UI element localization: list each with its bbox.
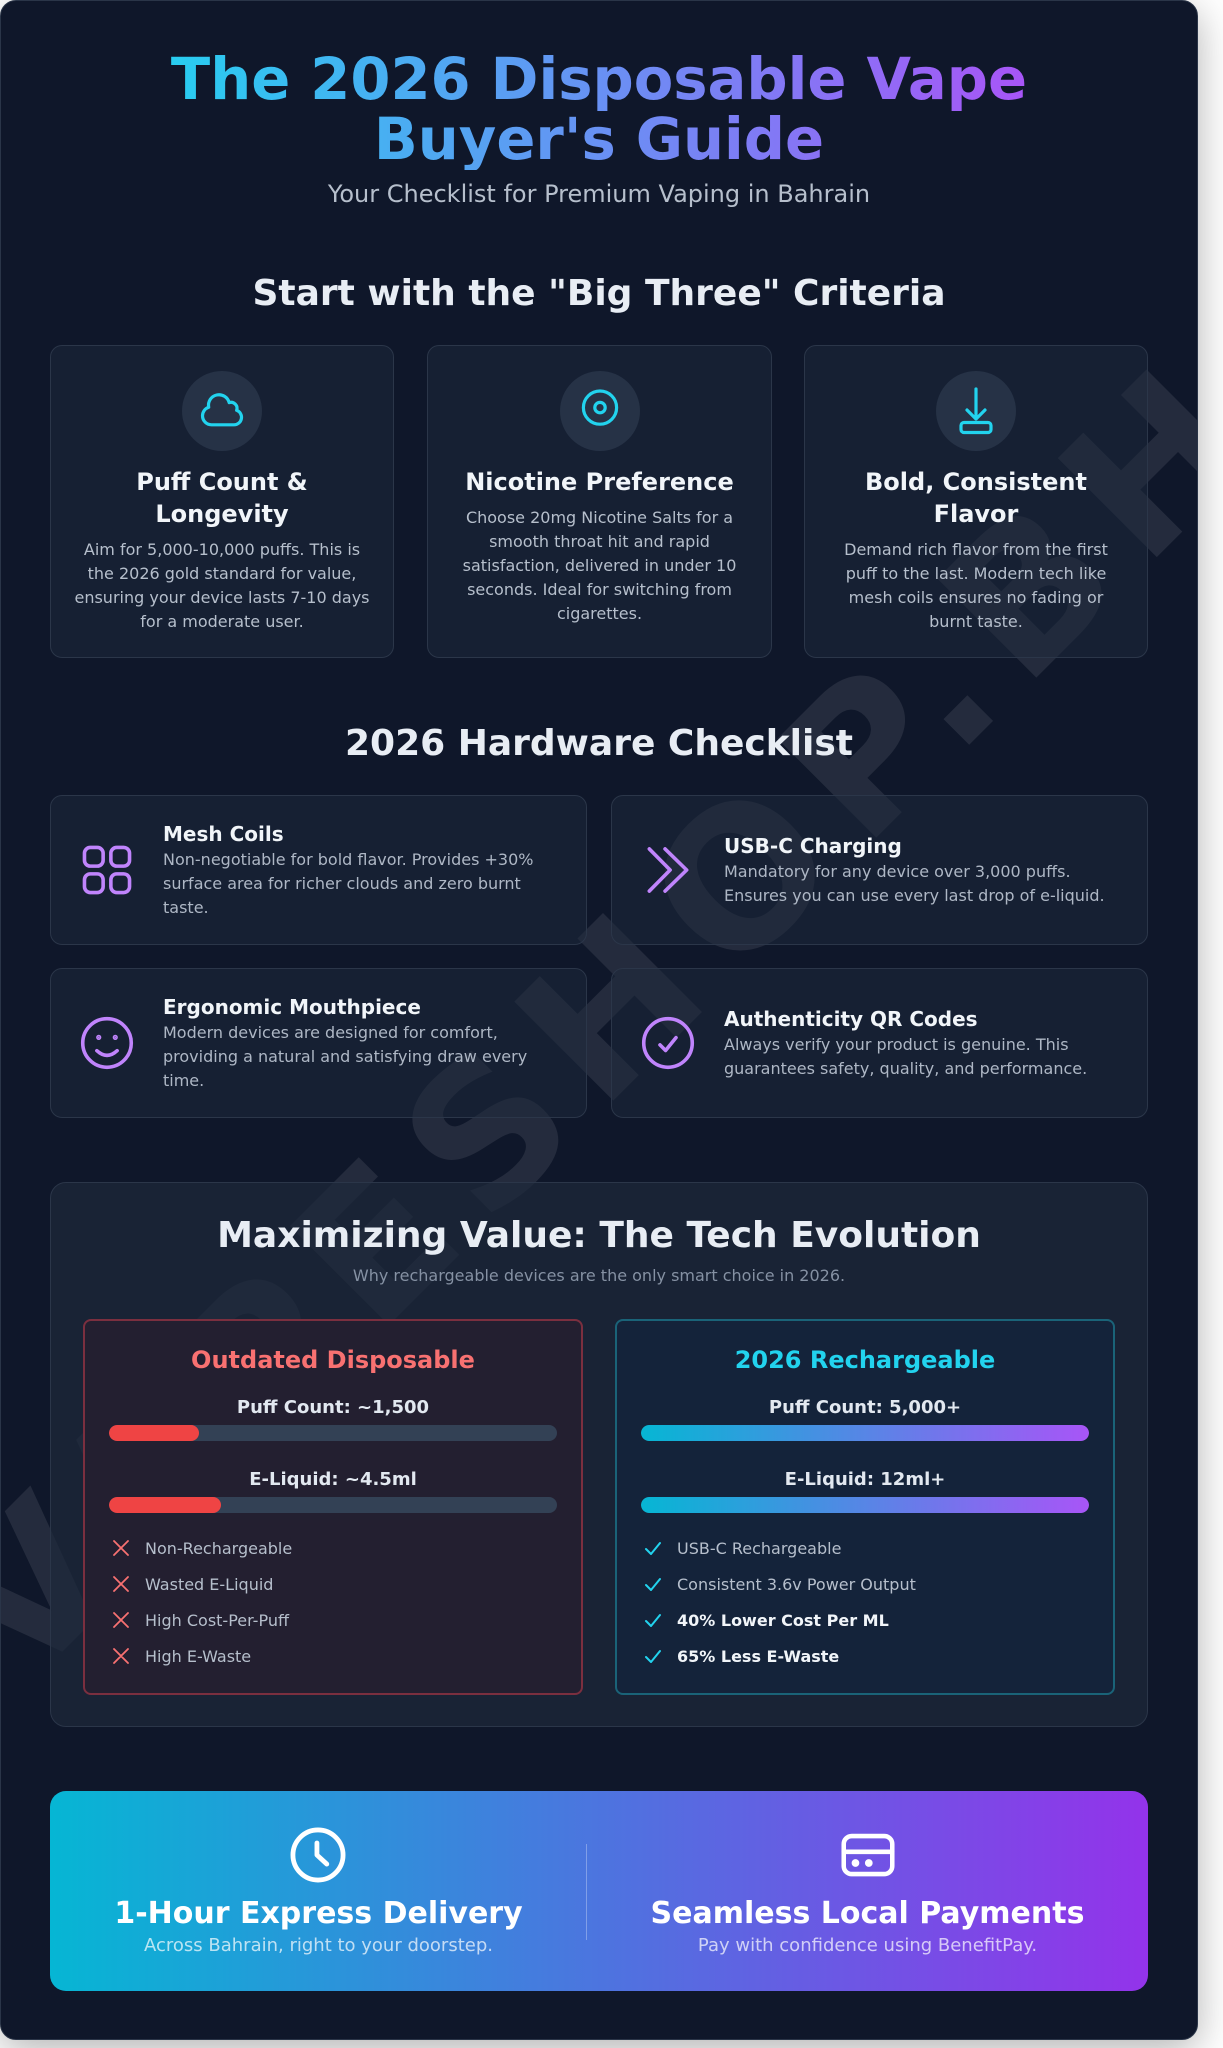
title: Buyer's Guide — [374, 106, 824, 173]
card heading: Longevity — [155, 500, 289, 528]
comparison: rechargeable — [615, 1319, 1115, 1695]
icon: clock — [290, 1828, 346, 1882]
column heading: Outdated Disposable — [191, 1346, 475, 1374]
list: drawbacks: High Cost-Per-Puff — [145, 1611, 289, 1630]
list: drawbacks: High E-Waste — [145, 1647, 251, 1666]
icon: smile — [80, 1016, 134, 1070]
payments heading: Seamless Local Payments — [651, 1896, 1084, 1931]
bar: puff count — [641, 1425, 1089, 1441]
list: benefits — [645, 1539, 916, 1666]
card text: the 2026 gold standard for value, — [88, 564, 356, 583]
card text: puff to the last. Modern tech like — [846, 564, 1106, 583]
icon: double chevron — [647, 847, 688, 893]
icon: credit card — [841, 1834, 895, 1876]
item text: Modern devices are designed for comfort, — [163, 1023, 498, 1042]
item text — [724, 862, 1105, 905]
card heading: Nicotine Preference — [465, 468, 734, 496]
card text: burnt taste. — [929, 612, 1023, 631]
delivery text: Across Bahrain, right to your doorstep. — [144, 1935, 493, 1956]
card text: seconds. Ideal for switching from — [467, 580, 732, 599]
bar: e-liquid — [109, 1497, 557, 1513]
item heading: Mesh Coils — [163, 822, 284, 846]
card text — [463, 508, 736, 623]
item heading: Authenticity QR Codes — [724, 1007, 978, 1031]
list: drawbacks: Non-Rechargeable — [145, 1539, 292, 1558]
panel: mouthpiece — [50, 968, 587, 1118]
item text — [163, 1023, 527, 1090]
heading: big three: Start with the "Big Three" Criteria — [252, 273, 946, 314]
card text: cigarettes. — [557, 604, 642, 623]
card heading — [136, 468, 308, 528]
card text — [74, 540, 370, 631]
bar: e-liquid — [641, 1497, 1089, 1513]
card text: mesh coils ensures no fading or — [849, 588, 1103, 607]
label: e-liquid: E-Liquid: ~4.5ml — [249, 1469, 417, 1490]
icon: target — [560, 371, 640, 451]
item text: taste. — [163, 898, 209, 917]
card heading: Flavor — [934, 500, 1018, 528]
list: benefits: USB-C Rechargeable — [677, 1539, 841, 1558]
section subheading: Why rechargeable devices are the only smart choice in 2026. — [353, 1266, 845, 1285]
section heading: Maximizing Value: The Tech Evolution — [217, 1215, 981, 1256]
item text: Non-negotiable for bold flavor. Provides +30% — [163, 850, 533, 869]
card text: ensuring your device lasts 7-10 days — [74, 588, 370, 607]
item text: surface area for richer clouds and zero burnt — [163, 874, 521, 893]
panel: mesh coils — [50, 795, 587, 945]
card text: satisfaction, delivered in under 10 — [463, 556, 736, 575]
panel: nicotine — [427, 345, 772, 658]
item text: Always verify your product is genuine. This — [724, 1035, 1069, 1054]
card text — [844, 540, 1108, 631]
card heading — [865, 468, 1087, 528]
title — [170, 50, 1028, 170]
panel: flavor — [804, 345, 1148, 658]
item text: Ensures you can use every last drop of e-liquid. — [724, 886, 1105, 905]
label: e-liquid: E-Liquid: 12ml+ — [785, 1469, 945, 1490]
item text: guarantees safety, quality, and performance. — [724, 1059, 1087, 1078]
label: puff count: Puff Count: 5,000+ — [769, 1397, 961, 1418]
list: drawbacks — [113, 1539, 292, 1666]
subtitle: Your Checklist for Premium Vaping in Bahrain — [328, 180, 870, 208]
icon: arrow into tray — [936, 371, 1016, 451]
panel: qr codes — [611, 968, 1148, 1118]
card text: for a moderate user. — [140, 612, 304, 631]
panel: tech evolution — [50, 1182, 1148, 1727]
card heading: Puff Count & — [136, 468, 308, 496]
item heading: USB-C Charging — [724, 834, 902, 858]
card text: smooth throat hit and rapid — [489, 532, 710, 551]
icon: check circle — [642, 1016, 694, 1070]
payments text: Pay with confidence using BenefitPay. — [698, 1935, 1037, 1956]
divider — [586, 1844, 587, 1940]
item text: providing a natural and satisfying draw every — [163, 1047, 527, 1066]
list: benefits: 65% Less E-Waste — [677, 1647, 839, 1666]
list: benefits: 40% Lower Cost Per ML — [677, 1611, 889, 1630]
title: The 2026 Disposable Vape — [171, 46, 1027, 113]
icon: grid — [82, 846, 132, 894]
delivery heading: 1-Hour Express Delivery — [114, 1896, 523, 1931]
card heading: Bold, Consistent — [865, 468, 1087, 496]
banner: delivery and payments — [50, 1791, 1148, 1991]
list: drawbacks: Wasted E-Liquid — [145, 1575, 273, 1594]
bar: puff count — [109, 1425, 557, 1441]
panel: usb-c — [611, 795, 1148, 945]
heading: hardware: 2026 Hardware Checklist — [345, 723, 853, 764]
item text: Mandatory for any device over 3,000 puffs. — [724, 862, 1071, 881]
column heading: 2026 Rechargeable — [735, 1346, 995, 1374]
item text: time. — [163, 1071, 204, 1090]
item text — [724, 1035, 1087, 1078]
item text — [163, 850, 533, 917]
list: benefits: Consistent 3.6v Power Output — [677, 1575, 916, 1594]
card text: Choose 20mg Nicotine Salts for a — [466, 508, 733, 527]
comparison: outdated — [83, 1319, 583, 1695]
icon: cloud — [182, 371, 262, 451]
card text: Demand rich flavor from the first — [844, 540, 1108, 559]
panel: puff count — [50, 345, 394, 658]
label: puff count: Puff Count: ~1,500 — [237, 1397, 429, 1418]
item heading: Ergonomic Mouthpiece — [163, 995, 421, 1019]
card text: Aim for 5,000-10,000 puffs. This is — [84, 540, 360, 559]
